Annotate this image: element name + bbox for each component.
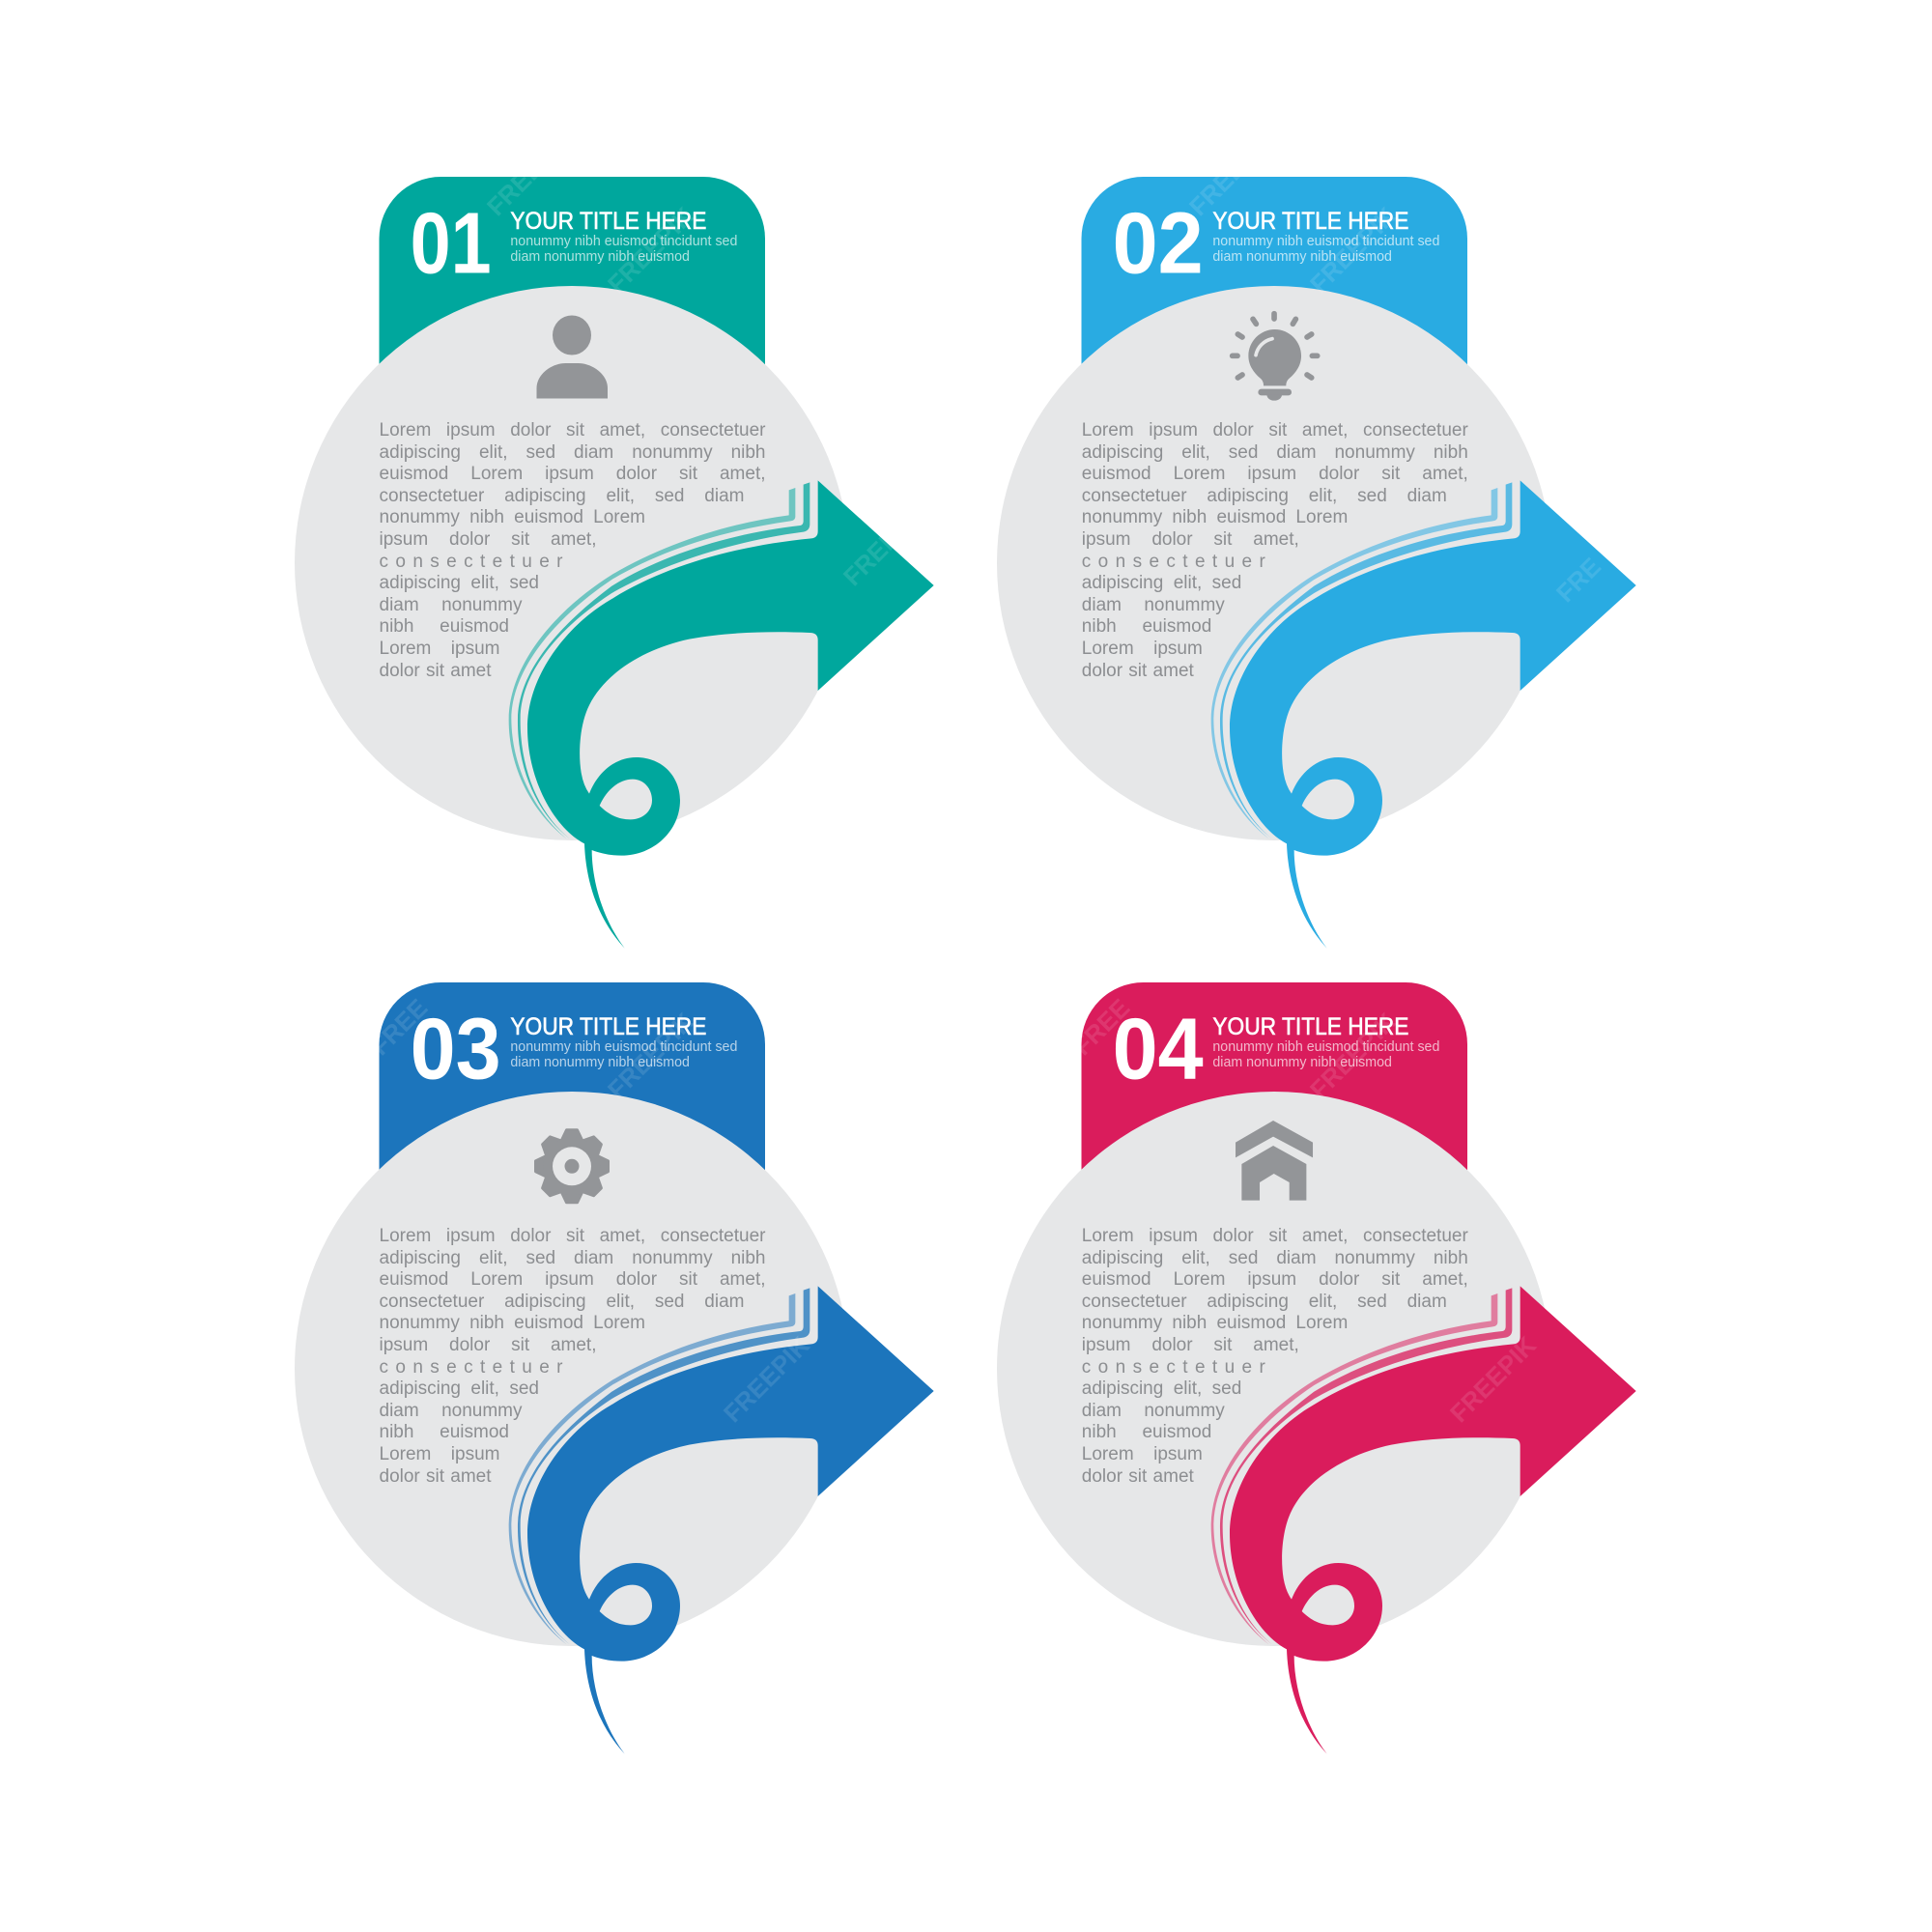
- body text: adipiscing elit, sed: [379, 1378, 539, 1399]
- body text: dolor sit amet: [1082, 661, 1194, 681]
- body text: consectetuer adipiscing elit, sed diam: [379, 1292, 744, 1312]
- body text: nonummy nibh euismod Lorem: [379, 507, 645, 527]
- body text: [379, 1226, 765, 1487]
- icon: light bulb: [1233, 314, 1318, 401]
- header tab: [1082, 177, 1467, 406]
- body text: diam nonummy: [379, 1401, 522, 1421]
- watermark: FRE: [1550, 552, 1606, 608]
- body text: nibh euismod: [379, 616, 509, 637]
- watermark: [481, 154, 905, 591]
- body text: Lorem ipsum dolor sit amet, consectetuer: [1082, 1226, 1468, 1246]
- body text: adipiscing elit, sed diam nonummy nibh: [379, 1248, 765, 1268]
- body text: adipiscing elit, sed diam nonummy nibh: [1082, 1248, 1468, 1268]
- body text: adipiscing elit, sed diam nonummy nibh: [1082, 442, 1468, 463]
- subheading line 2: diam nonummy nibh euismod: [510, 1054, 690, 1070]
- number: 03: [411, 1001, 501, 1097]
- body text: ipsum dolor sit amet,: [1082, 1335, 1299, 1355]
- watermark: FREE: [838, 524, 905, 591]
- watermark: [365, 993, 815, 1428]
- graphic: step 02: [997, 174, 1636, 949]
- subheading line 1: nonummy nibh euismod tincidunt sed: [1213, 233, 1440, 249]
- body text: nibh euismod: [379, 1422, 509, 1442]
- body text: adipiscing elit, sed: [379, 573, 539, 593]
- body text: dolor sit amet: [1082, 1466, 1194, 1487]
- body text: consectetuer adipiscing elit, sed diam: [379, 486, 744, 506]
- body text: nonummy nibh euismod Lorem: [1082, 507, 1348, 527]
- body text: Lorem ipsum: [1082, 1444, 1203, 1464]
- subheading line 1: nonummy nibh euismod tincidunt sed: [510, 233, 737, 249]
- grey circle: [295, 286, 849, 840]
- body text: Lorem ipsum dolor sit amet, consectetuer: [379, 420, 765, 440]
- body text: nibh euismod: [1082, 1422, 1211, 1442]
- body text: adipiscing elit, sed diam nonummy nibh: [379, 442, 765, 463]
- body text: diam nonummy: [1082, 1401, 1225, 1421]
- grey circle: [997, 1092, 1551, 1646]
- body text: dolor sit amet: [379, 1466, 491, 1487]
- heading: YOUR TITLE HERE: [510, 208, 706, 235]
- icon: house: [1236, 1121, 1313, 1201]
- body text: Lorem ipsum: [1082, 639, 1203, 659]
- graphic: step 04: [997, 982, 1636, 1754]
- body text: ipsum dolor sit amet,: [379, 1335, 597, 1355]
- body text: ipsum dolor sit amet,: [1082, 529, 1299, 550]
- grey circle: [997, 286, 1551, 840]
- body text: euismod Lorem ipsum dolor sit amet,: [379, 464, 765, 484]
- body text: Lorem ipsum: [379, 1444, 500, 1464]
- number: 02: [1113, 195, 1204, 292]
- body text: c o n s e c t e t u e r: [1082, 1357, 1265, 1378]
- arrow with stripes: [1211, 1286, 1636, 1754]
- body text: nibh euismod: [1082, 616, 1211, 637]
- body text: [1082, 420, 1468, 681]
- icon: gear: [535, 1130, 609, 1203]
- body text: nonummy nibh euismod Lorem: [1082, 1313, 1348, 1333]
- watermark: FREEPIK: [602, 201, 699, 298]
- heading: YOUR TITLE HERE: [510, 1013, 706, 1040]
- subheading line 1: nonummy nibh euismod tincidunt sed: [510, 1038, 737, 1055]
- body text: euismod Lorem ipsum dolor sit amet,: [379, 1269, 765, 1290]
- icon: person: [537, 315, 608, 398]
- number: 04: [1113, 1001, 1204, 1097]
- watermark: FREE: [1067, 993, 1136, 1061]
- panel: step 01: [295, 174, 934, 949]
- header tab: [379, 982, 765, 1211]
- watermark: FREEPIK: [602, 1007, 699, 1104]
- subheading line 2: diam nonummy nibh euismod: [1213, 248, 1392, 265]
- watermark: FREEPIK: [718, 1330, 815, 1428]
- watermark: [1183, 154, 1606, 608]
- body text: Lorem ipsum dolor sit amet, consectetuer: [1082, 420, 1468, 440]
- heading: YOUR TITLE HERE: [1213, 1013, 1409, 1040]
- watermark: FREE: [365, 993, 433, 1061]
- arrow with stripes: [1211, 480, 1636, 949]
- watermark: FREEPIK: [1444, 1330, 1542, 1428]
- watermark: FREEPIK: [1304, 201, 1402, 298]
- subheading line 2: diam nonummy nibh euismod: [1213, 1054, 1392, 1070]
- body text: consectetuer adipiscing elit, sed diam: [1082, 1292, 1447, 1312]
- body text: euismod Lorem ipsum dolor sit amet,: [1082, 1269, 1468, 1290]
- graphic: step 01: [295, 174, 934, 949]
- header tab: [379, 177, 765, 406]
- number: 01: [411, 195, 492, 292]
- panel: step 04: [997, 982, 1636, 1754]
- subheading line 1: nonummy nibh euismod tincidunt sed: [1213, 1038, 1440, 1055]
- body text: dolor sit amet: [379, 661, 491, 681]
- body text: diam nonummy: [379, 595, 522, 615]
- arrow with stripes: [509, 480, 934, 949]
- body text: nonummy nibh euismod Lorem: [379, 1313, 645, 1333]
- body text: c o n s e c t e t u e r: [379, 1357, 562, 1378]
- body text: [1082, 1226, 1468, 1487]
- panel: step 02: [997, 174, 1636, 949]
- watermark: [1067, 993, 1542, 1428]
- subheading line 2: diam nonummy nibh euismod: [510, 248, 690, 265]
- graphic: step 03: [295, 982, 934, 1754]
- watermark: FREEPIK: [1304, 1007, 1402, 1104]
- body text: euismod Lorem ipsum dolor sit amet,: [1082, 464, 1468, 484]
- body text: Lorem ipsum dolor sit amet, consectetuer: [379, 1226, 765, 1246]
- body text: c o n s e c t e t u e r: [1082, 552, 1265, 572]
- panel: step 03: [295, 982, 934, 1754]
- body text: c o n s e c t e t u e r: [379, 552, 562, 572]
- body text: diam nonummy: [1082, 595, 1225, 615]
- body text: adipiscing elit, sed: [1082, 1378, 1241, 1399]
- heading: YOUR TITLE HERE: [1213, 208, 1409, 235]
- header tab: [1082, 982, 1467, 1211]
- arrow with stripes: [509, 1286, 934, 1754]
- body text: consectetuer adipiscing elit, sed diam: [1082, 486, 1447, 506]
- body text: adipiscing elit, sed: [1082, 573, 1241, 593]
- body text: [379, 420, 765, 681]
- body text: ipsum dolor sit amet,: [379, 529, 597, 550]
- grey circle: [295, 1092, 849, 1646]
- body text: Lorem ipsum: [379, 639, 500, 659]
